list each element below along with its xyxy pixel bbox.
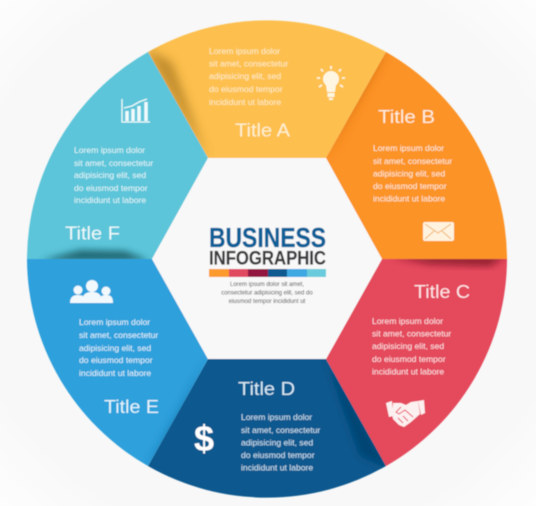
panel: Title B: sit amet, consectetur <box>373 156 452 166</box>
icon: dollar sign: $ <box>194 418 214 459</box>
panel: Title B: Title B <box>378 106 435 127</box>
panel: Title B <box>324 48 507 259</box>
panel: Title A: adipisicing elit, sed <box>209 71 281 81</box>
panel: Title F <box>27 52 208 261</box>
panel: Title F: adipisicing elit, sed <box>74 170 146 180</box>
panel: Title D: adipisicing elit, sed <box>241 438 313 448</box>
icon: envelope <box>423 222 454 241</box>
panel: Title E: Title E <box>104 396 159 417</box>
panel: Title D: sit amet, consectetur <box>241 425 320 435</box>
panel: Title C: Lorem ipsum dolor <box>372 316 443 326</box>
panel: Title C: adipisicing elit, sed <box>372 341 444 351</box>
heading: business: BUSINESS <box>209 222 326 253</box>
panel: Title C <box>326 257 507 466</box>
panel: Title B: incididunt ut labore <box>373 194 445 204</box>
panel: Title E <box>27 259 210 470</box>
panel: Title E: do eiusmod tempor <box>79 355 153 365</box>
panel: Title D: Title D <box>238 378 295 399</box>
icon: handshake <box>386 400 425 427</box>
panel: Title B: Lorem ipsum dolor <box>373 143 444 153</box>
icon: people <box>70 280 113 303</box>
icon: bar chart <box>122 99 150 122</box>
panel: Title E: Lorem ipsum dolor <box>79 317 150 327</box>
panel: Title C: sit amet, consectetur <box>372 328 451 338</box>
panel: Title A: sit amet, consectetur <box>209 58 288 68</box>
icon: light bulb <box>317 66 345 100</box>
panel: Title C: incididunt ut labore <box>372 366 444 376</box>
panel: Title F: Title F <box>65 222 120 244</box>
panel: Title A: Lorem ipsum dolor <box>209 46 280 56</box>
panel: Title F: incididunt ut labore <box>74 195 146 205</box>
panel: Title B: do eiusmod tempor <box>373 181 447 191</box>
panel: Title E: sit amet, consectetur <box>79 330 158 340</box>
panel: Title A: do eiusmod tempor <box>209 84 283 94</box>
panel: Title E: incididunt ut labore <box>79 368 151 378</box>
panel: Title A <box>145 20 386 160</box>
heading: infographic: INFOGRAPHIC <box>209 248 326 270</box>
center text: eiusmod tempor incididunt ut <box>229 299 306 305</box>
panel: Title F: do eiusmod tempor <box>74 183 148 193</box>
panel: Title D: incididunt ut labore <box>241 462 313 472</box>
panel: Title B: adipisicing elit, sed <box>373 168 445 178</box>
center text: consectetur adipisicing elit, sed do <box>221 290 313 296</box>
panel: Title A: Title A <box>235 120 291 140</box>
panel: Title C: do eiusmod tempor <box>372 354 446 364</box>
panel: center hexagon <box>152 158 382 359</box>
colour bar <box>209 269 326 277</box>
panel: Title E: adipisicing elit, sed <box>79 343 151 353</box>
panel: Title F: Lorem ipsum dolor <box>74 145 145 155</box>
center text: Lorem ipsum dolor sit amet, <box>230 282 304 288</box>
panel: Title D: Lorem ipsum dolor <box>241 412 312 422</box>
panel: Title D: do eiusmod tempor <box>241 450 315 460</box>
panel: Title F: sit amet, consectetur <box>74 158 153 168</box>
panel: Title C: Title C <box>414 281 470 302</box>
panel: Title D <box>148 358 388 498</box>
panel: Title A: incididunt ut labore <box>209 97 281 107</box>
